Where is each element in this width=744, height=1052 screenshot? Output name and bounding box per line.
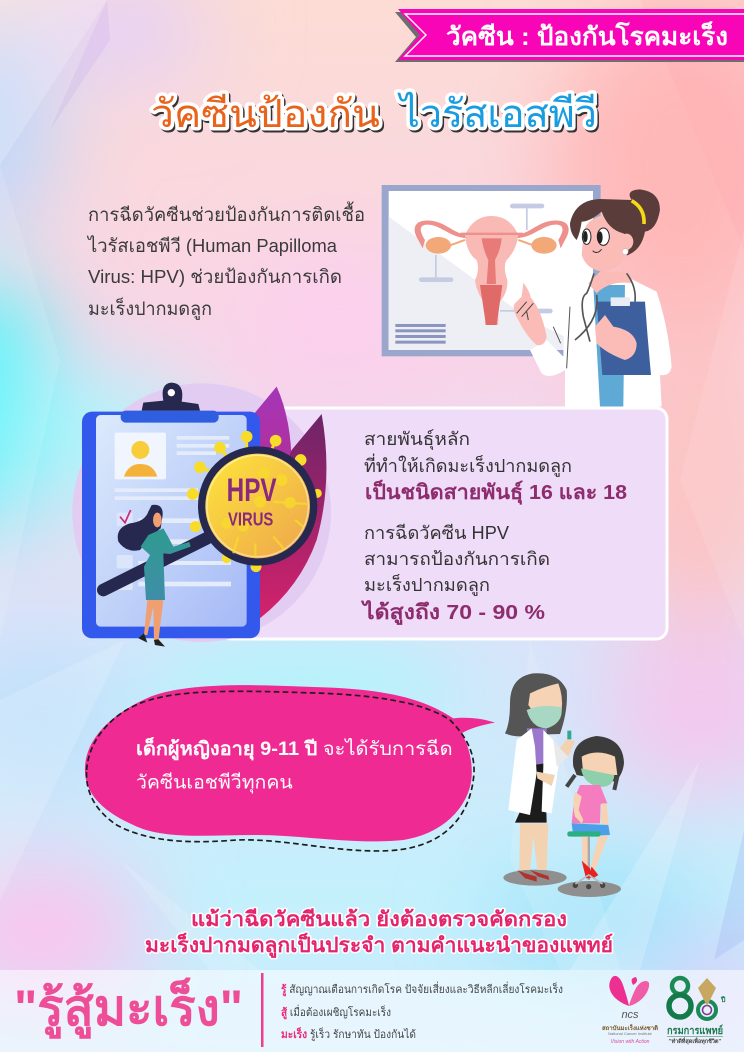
- intro paragraph: [86, 201, 365, 320]
- panel text: สายพันธุ์หลัก: [364, 429, 470, 450]
- campaign lines: รู้ สัญญาณเตือนการเกิดโรค ปัจจัยเสี่ยงและวิธีหลีกเลี่ยงโรคมะเร็ง: [281, 981, 563, 997]
- campaign lines: [281, 981, 563, 1041]
- doctor: [505, 673, 575, 882]
- panel text: เป็นชนิดสายพันธุ์ 16 และ 18: [365, 478, 627, 505]
- illustration: doctor vaccinating girl: [503, 673, 624, 897]
- logo: National Cancer Institute: [602, 976, 658, 1045]
- intro paragraph: มะเร็งปากมดลูก: [88, 296, 212, 320]
- title: ไวรัสเอสพีวี: [398, 94, 598, 138]
- intro paragraph: ไวรัสเอชพีวี (Human Papilloma: [86, 235, 338, 256]
- intro paragraph: Virus: HPV) ช่วยป้องกันการเกิด: [88, 266, 342, 287]
- footer band: [0, 970, 744, 1052]
- logo: Department of Medical Services 80 years: "ทำดีที่สุดเพื่อทุกชีวิต": [669, 1037, 721, 1045]
- logo: Department of Medical Services 80 years: กรมการแพทย์: [667, 1024, 723, 1037]
- anatomy board: [382, 185, 601, 356]
- speech bubble: [85, 685, 495, 851]
- girl: [567, 736, 624, 889]
- logo: Department of Medical Services 80 years: [667, 978, 726, 1045]
- campaign name: "รู้สู้มะเร็ง": [14, 977, 243, 1039]
- panel text: [361, 429, 627, 626]
- logo: National Cancer Institute: ncs: [621, 1009, 639, 1021]
- panel text: มะเร็งปากมดลูก: [364, 573, 490, 596]
- warning message: มะเร็งปากมดลูกเป็นประจำ ตามคำแนะนำของแพทย์: [145, 931, 613, 959]
- title: วัคซีนป้องกัน: [151, 93, 380, 136]
- category ribbon: [395, 9, 744, 62]
- title: ไวรัสเอสพีวี: [397, 92, 597, 136]
- title: [151, 92, 598, 138]
- illustration: doctor with anatomy board: [382, 185, 672, 407]
- woman with magnifier: [118, 505, 191, 647]
- ribbon text: วัคซีน : ป้องกันโรคมะเร็ง: [446, 21, 728, 51]
- panel text: การฉีดวัคซีน HPV: [364, 523, 509, 543]
- campaign lines: สู้ เมื่อต้องเผชิญโรคมะเร็ง: [281, 1004, 391, 1020]
- info panel: [72, 383, 667, 647]
- logo: National Cancer Institute: Vision with Action: [611, 1039, 650, 1045]
- warning message: แม้ว่าฉีดวัคซีนแล้ว ยังต้องตรวจคัดกรอง: [191, 908, 567, 931]
- bubble text: วัคซีนเอชพีวีทุกคน: [136, 771, 293, 794]
- warning message: [145, 908, 613, 959]
- panel text: ได้สูงถึง 70 - 90 %: [361, 600, 545, 626]
- title: วัคซีนป้องกัน: [152, 95, 382, 138]
- logo: National Cancer Institute: สถาบันมะเร็งแห่งชาติ: [602, 1023, 658, 1032]
- virus magnifier: [188, 432, 320, 571]
- logo: Department of Medical Services 80 years: ปี: [720, 996, 726, 1004]
- panel text: ที่ทำให้เกิดมะเร็งปากมดลูก: [364, 453, 572, 477]
- logo: National Cancer Institute: National Cancer Institute: [608, 1031, 653, 1036]
- illustration: HPV clipboard: [72, 383, 331, 647]
- intro paragraph: การฉีดวัคซีนช่วยป้องกันการติดเชื้อ: [88, 201, 365, 225]
- virus magnifier: VIRUS: [228, 508, 273, 529]
- bubble text: [136, 736, 453, 794]
- magnifying glass handle: [103, 537, 210, 590]
- uterus diagram: [415, 216, 569, 325]
- panel text: สามารถป้องกันการเกิด: [364, 549, 550, 569]
- doctor: [514, 189, 672, 407]
- virus magnifier: HPV: [227, 472, 277, 508]
- campaign lines: มะเร็ง รู้เร็ว รักษาทัน ป้องกันได้: [281, 1027, 416, 1041]
- bubble text: เด็กผู้หญิงอายุ 9-11 ปี จะได้รับการฉีด: [136, 736, 453, 761]
